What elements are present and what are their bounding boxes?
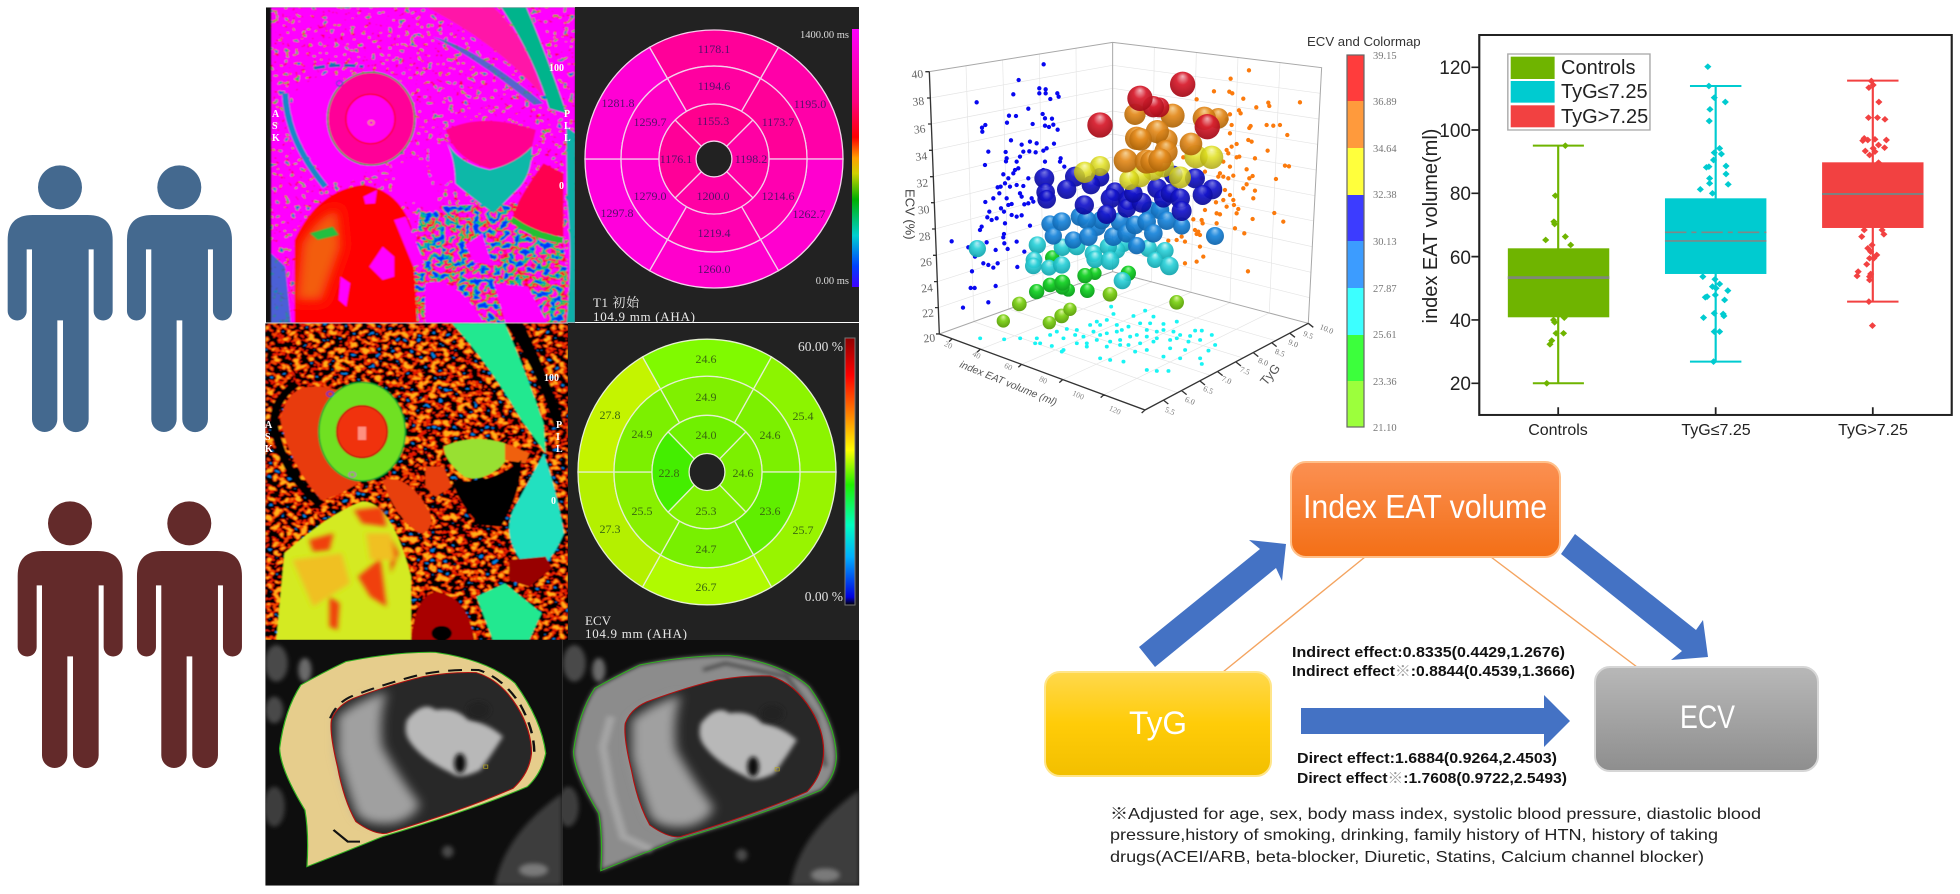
node: TyG <box>1045 672 1271 776</box>
x axis labels: TyG≤7.25 <box>1681 422 1751 439</box>
text: T1 map side markers: P <box>564 109 570 120</box>
labels: ECV axis ticks <box>911 67 936 346</box>
data: floor projection dots <box>980 307 1215 371</box>
panel: T1 bullseye <box>575 7 859 324</box>
x axis labels <box>1528 422 1908 439</box>
colorbar: discrete segments <box>1347 55 1364 427</box>
labels: colormap values <box>1373 51 1397 434</box>
labels: TyG axis ticks <box>1164 322 1335 417</box>
labels: volume axis ticks: 80 <box>1038 374 1049 386</box>
boxplot: controls <box>1508 146 1609 383</box>
icon: brown person right <box>137 501 242 768</box>
label: TyG axis title: TyG <box>1258 361 1283 388</box>
labels: colormap values: 30.13 <box>1373 237 1397 248</box>
labels: ECV axis ticks: 40 <box>911 67 924 82</box>
connector lines <box>1223 557 1637 672</box>
data: yellow spheres <box>1074 145 1223 190</box>
text: direct effect results: Direct effect ※:1.7608(0.9722,2.5493) <box>1297 770 1567 787</box>
labels: T1 segment values: 1259.7 <box>634 115 666 129</box>
labels: T1 segment values: 1178.1 <box>698 42 730 56</box>
labels: ECV segment values: 25.5 <box>632 504 652 518</box>
labels: volume axis ticks: 40 <box>971 349 982 361</box>
labels: T1 segment values: 1194.6 <box>698 79 730 93</box>
y axis tick labels: 100 <box>1439 121 1471 142</box>
labels: TyG axis ticks: 8.0 <box>1257 356 1270 368</box>
text: ECV caption: 104.9 mm (AHA) <box>585 626 688 641</box>
text: indirect effect results: Indirect effect ※:0.8844(0.4539,1.3666) <box>1292 663 1575 680</box>
colorbar: ECV scale <box>845 338 855 605</box>
labels: ECV scale limits: 60.00 % <box>798 339 843 354</box>
labels: ECV axis ticks: 24 <box>921 281 934 296</box>
icon: blue person right <box>127 165 232 432</box>
labels: ECV axis ticks: 26 <box>920 255 933 270</box>
labels: T1 segment values: 1176.1 <box>660 152 692 166</box>
labels: colormap values: 25.61 <box>1373 330 1397 341</box>
text: ECV map side markers: K <box>265 444 273 455</box>
labels: TyG axis ticks: 7.0 <box>1220 374 1233 386</box>
text: ECV caption: ECV <box>585 613 612 628</box>
data: lime spheres <box>997 287 1184 329</box>
labels: ECV segment values: 24.9 <box>632 427 652 441</box>
text: direct effect results: Direct effect:1.6884(0.9264,2.4503) <box>1297 750 1557 767</box>
node: index EAT volume: Index EAT volume <box>1303 488 1547 525</box>
label: volume axis title: index EAT volume (ml) <box>958 360 1058 409</box>
chart: T1 polar map segments <box>585 30 843 288</box>
labels: colormap values: 34.64 <box>1373 144 1397 155</box>
text: T1 map side markers: 0 <box>559 181 564 192</box>
y axis tick labels: 80 <box>1450 184 1471 205</box>
labels: ECV segment values: 27.3 <box>600 522 620 536</box>
legend labels: Controls <box>1561 57 1635 79</box>
label: ECV axis title: ECV (%) <box>902 189 917 240</box>
labels: ECV axis ticks: 32 <box>916 176 929 191</box>
colorbar: T1 scale <box>852 29 859 287</box>
icon group: brown people <box>18 501 242 768</box>
labels: T1 segment values: 1195.0 <box>794 97 826 111</box>
labels: volume axis ticks: 20 <box>943 339 954 351</box>
text: adjustment footnote <box>1110 806 1761 866</box>
labels: TyG axis ticks: 8.5 <box>1274 347 1286 359</box>
labels: ECV axis ticks: 20 <box>923 331 936 346</box>
text: direct effect results <box>1297 750 1567 787</box>
labels: colormap values: 27.87 <box>1373 284 1397 295</box>
chart: ECV polar map segments <box>578 339 836 605</box>
labels: ECV axis ticks: 30 <box>917 203 930 217</box>
labels: ECV segment values: 26.7 <box>696 580 716 594</box>
text: indirect effect results <box>1292 644 1575 680</box>
labels: ECV segment values: 27.8 <box>600 408 620 422</box>
labels: T1 segment values: 1155.3 <box>697 114 729 128</box>
labels: ECV segment values <box>600 352 814 594</box>
labels: T1 segment values: 1200.0 <box>696 189 730 203</box>
labels: ECV segment values: 25.4 <box>792 409 814 423</box>
labels: volume axis ticks: 60 <box>1003 361 1014 373</box>
x axis labels: Controls <box>1528 422 1588 439</box>
text: T1 caption: T1 初始 <box>593 295 640 310</box>
panel: cine MRI with segmented fat <box>264 640 562 886</box>
labels: volume axis ticks: 100 <box>1071 389 1086 402</box>
labels: ECV segment values: 25.7 <box>792 523 814 537</box>
legend labels <box>1561 57 1648 128</box>
labels: colormap values: 23.36 <box>1373 377 1397 388</box>
labels: TyG axis ticks: 6.5 <box>1202 384 1215 396</box>
text: indirect effect results: Indirect effect:0.8335(0.4429,1.2676) <box>1292 644 1565 661</box>
labels: colormap values: 36.89 <box>1373 97 1397 108</box>
labels: T1 segment values: 1262.7 <box>792 207 826 221</box>
y axis tick labels: 40 <box>1450 311 1471 332</box>
arrow: TyG to ECV <box>1301 695 1570 747</box>
text: ECV map side markers: I <box>556 432 560 443</box>
chart: 3D scatter of index EAT volume, TyG and ECV <box>902 42 1335 417</box>
text: ECV map side markers: S <box>265 432 271 443</box>
labels: T1 scale limits: 0.00 ms <box>816 276 849 287</box>
node: ECV: ECV <box>1680 699 1736 735</box>
data: right wall projection dots <box>1168 70 1300 271</box>
y axis tick labels: 20 <box>1450 374 1471 395</box>
legend: ECV colormap <box>1307 34 1421 434</box>
labels: ECV scale limits: 0.00 % <box>805 589 843 604</box>
labels: volume axis ticks <box>943 339 1122 417</box>
text: ECV map side markers: P <box>556 420 562 431</box>
labels: ECV scale limits <box>798 339 843 604</box>
legend box <box>1508 54 1650 130</box>
labels: TyG axis ticks: 7.5 <box>1239 365 1251 377</box>
labels: T1 segment values: 1219.4 <box>698 226 730 240</box>
arrow: TyG to index EAT volume <box>1139 540 1286 667</box>
text: adjustment footnote: drugs(ACEI/ARB, beta-blocker, Diuretic, Statins, Calcium channel blocker) <box>1110 849 1704 866</box>
labels: T1 segment values: 1214.6 <box>762 189 794 203</box>
text: T1 map side markers: S <box>272 121 278 132</box>
arrow: index EAT volume to ECV <box>1561 534 1708 660</box>
labels: T1 segment values: 1297.8 <box>600 206 634 220</box>
y axis tick labels <box>1439 58 1471 395</box>
labels: TyG axis ticks: 5.5 <box>1164 405 1176 417</box>
labels: T1 segment values: 1260.0 <box>698 262 730 276</box>
labels: T1 segment values: 1198.2 <box>735 152 767 166</box>
labels: TyG axis ticks: 10.0 <box>1318 322 1335 336</box>
labels: ECV segment values: 25.3 <box>696 504 716 518</box>
x axis labels: TyG>7.25 <box>1838 422 1908 439</box>
diagram: mediation model <box>1045 462 1818 866</box>
node: ECV <box>1595 667 1818 771</box>
labels: ECV axis ticks: 34 <box>915 150 928 164</box>
legend labels: TyG≤7.25 <box>1561 81 1648 103</box>
text: ECV map side markers: 0 <box>551 496 556 507</box>
labels: ECV segment values: 22.8 <box>658 466 680 480</box>
text: T1 map side markers: A <box>272 109 280 120</box>
labels: ECV axis ticks: 38 <box>912 95 925 109</box>
node: TyG: TyG <box>1129 705 1187 741</box>
labels: T1 scale limits: 1400.00 ms <box>800 30 849 41</box>
labels: colormap values: 21.10 <box>1373 423 1397 434</box>
text: T1 caption <box>593 295 696 324</box>
labels: TyG axis ticks: 9.0 <box>1287 337 1300 350</box>
labels: TyG axis ticks: 6.0 <box>1184 395 1196 407</box>
labels: T1 segment values <box>600 42 826 276</box>
labels: ECV segment values: 23.6 <box>760 504 780 518</box>
labels: TyG axis ticks: 9.5 <box>1302 329 1315 341</box>
labels: T1 segment values: 1281.8 <box>602 96 634 110</box>
data: navy spheres <box>1034 166 1222 224</box>
icon group: blue people <box>8 165 232 432</box>
labels: ECV axis ticks: 28 <box>918 230 931 244</box>
labels: ECV axis ticks: 22 <box>922 306 935 321</box>
labels: colormap values: 39.15 <box>1373 51 1397 62</box>
panel: ECV bullseye <box>568 323 859 641</box>
data: left wall projection dots <box>952 64 1064 308</box>
text: ECV map side markers <box>265 373 563 507</box>
y axis title: index EAT volume(ml) <box>1420 129 1442 323</box>
icon: brown person left <box>18 501 123 768</box>
chart: index EAT volume box plot <box>1420 35 1952 439</box>
text: T1 map side markers: K <box>272 133 280 144</box>
labels: volume axis ticks: 120 <box>1108 404 1122 417</box>
labels: ECV segment values: 24.9 <box>696 390 716 404</box>
data: green spheres <box>1029 250 1136 299</box>
data: cyan spheres <box>969 235 1179 289</box>
labels: ECV segment values: 24.6 <box>696 352 716 366</box>
text: ECV caption <box>585 613 688 641</box>
data: orange spheres <box>1114 104 1229 174</box>
labels: ECV axis ticks: 36 <box>913 122 926 137</box>
labels: T1 scale limits <box>800 30 849 287</box>
y axis tick labels: 60 <box>1450 248 1471 269</box>
text: T1 caption: 104.9 mm (AHA) <box>593 309 696 324</box>
icon: blue person left <box>8 165 113 432</box>
labels: colormap values: 32.38 <box>1373 190 1397 201</box>
labels: ECV segment values: 24.6 <box>732 466 754 480</box>
text: ECV map side markers: L <box>556 444 563 455</box>
text: T1 map side markers <box>272 63 571 192</box>
labels: T1 segment values: 1173.7 <box>762 115 794 129</box>
panel: cine MRI with contours <box>558 640 859 886</box>
panel: ECV map image <box>265 323 568 641</box>
text: T1 map side markers: L <box>564 121 571 132</box>
text: T1 map side markers: L <box>564 133 571 144</box>
text: adjustment footnote: pressure,history of smoking, drinking, family history of HTN, history of taking <box>1110 827 1718 844</box>
labels: ECV segment values: 24.0 <box>696 428 716 442</box>
text: T1 map side markers: 100 <box>549 63 564 74</box>
label: colormap title: ECV and Colormap <box>1307 34 1421 49</box>
labels: T1 segment values: 1279.0 <box>634 189 666 203</box>
text: ECV map side markers: A <box>265 420 273 431</box>
panel: T1 map image <box>266 7 575 323</box>
text: adjustment footnote: ※Adjusted for age, sex, body mass index, systolic blood pressure, diastolic blood <box>1110 806 1761 823</box>
plot geometry <box>1471 35 1952 415</box>
text: ECV map side markers: 100 <box>544 373 559 384</box>
y axis tick labels: 120 <box>1439 58 1471 79</box>
labels: ECV segment values: 24.7 <box>696 542 716 556</box>
labels: ECV segment values: 24.6 <box>760 428 780 442</box>
data: blue spheres <box>1041 201 1224 254</box>
node: index EAT volume <box>1291 462 1560 557</box>
boxplot: TyG at or below 7.25 <box>1665 67 1766 362</box>
legend labels: TyG>7.25 <box>1561 106 1648 128</box>
data: red spheres <box>1087 72 1220 139</box>
boxplot: TyG above 7.25 <box>1822 81 1924 326</box>
